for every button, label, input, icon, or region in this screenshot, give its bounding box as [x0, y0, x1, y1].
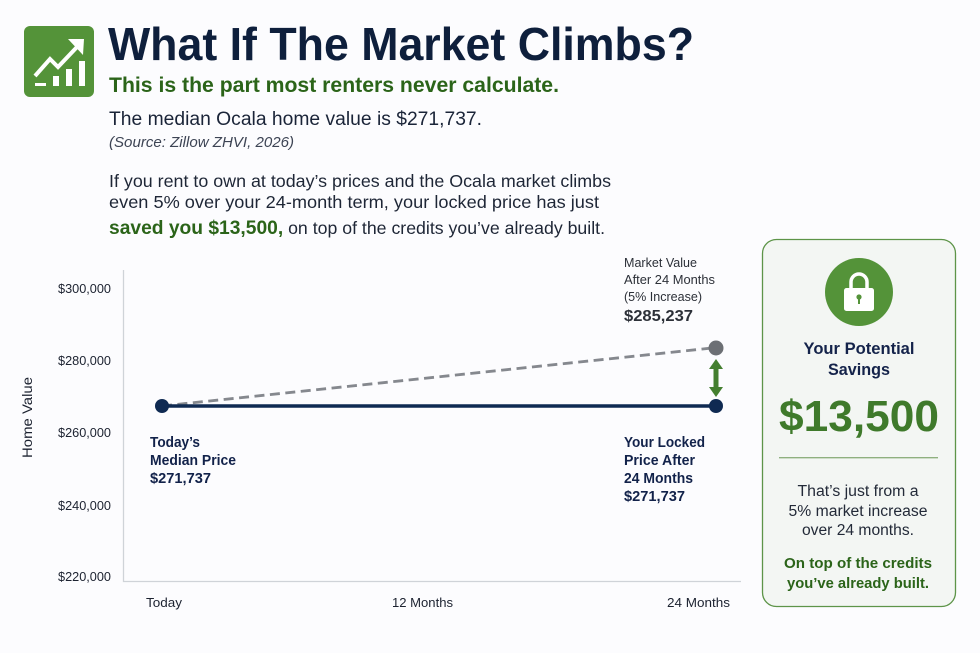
explanatory paragraph: saved you $13,500, on top of the credits you’ve already built. [109, 218, 605, 239]
savings explanation [788, 483, 928, 539]
explanatory paragraph: If you rent to own at today’s prices and the Ocala market climbs [109, 171, 611, 191]
chart axes [124, 270, 741, 582]
label: locked price after 24 months: Your Locked [624, 435, 705, 451]
credits note: On top of the credits [784, 556, 932, 572]
title: What If The Market Climbs? [108, 18, 694, 70]
credits note: you’ve already built. [787, 576, 929, 592]
line chart [19, 255, 741, 610]
label: market value after 24 months: $285,237 [624, 308, 693, 325]
source note: (Source: Zillow ZHVI, 2026) [109, 134, 294, 151]
y axis labels: $280,000 [58, 354, 111, 368]
label: locked price after 24 months: $271,737 [624, 489, 685, 505]
market value marker [708, 340, 724, 356]
x axis labels [146, 595, 731, 610]
icon: padlock [825, 258, 893, 326]
label: today's median price: Median Price [150, 453, 236, 469]
credits note [784, 556, 932, 592]
label: market value after 24 months [624, 255, 715, 325]
savings explanation: 5% market increase [788, 503, 928, 520]
savings heading: Savings [828, 361, 890, 379]
x axis labels: 12 Months [392, 595, 454, 610]
today marker [155, 399, 169, 413]
y axis labels: $260,000 [58, 426, 111, 440]
icon: rising market chart [24, 26, 94, 97]
label: locked price after 24 months: Price After [624, 453, 695, 469]
savings heading [804, 340, 914, 379]
x axis labels: Today [146, 595, 183, 610]
label: today's median price [150, 435, 236, 487]
y axis labels: $300,000 [58, 282, 111, 296]
label: locked price after 24 months: 24 Months [624, 471, 693, 487]
label: market value after 24 months: (5% Increase) [624, 289, 702, 304]
x axis labels: 24 Months [667, 595, 731, 610]
y axis labels: $220,000 [58, 570, 111, 584]
explanatory paragraph: even 5% over your 24-month term, your locked price has just [109, 192, 599, 212]
difference arrow [709, 359, 723, 397]
locked price line [162, 404, 716, 408]
panel: potential savings [762, 240, 956, 606]
savings explanation: over 24 months. [802, 522, 914, 539]
median value statement: The median Ocala home value is $271,737. [109, 109, 482, 130]
savings heading: Your Potential [804, 340, 914, 358]
label: today's median price: Today’s [150, 435, 200, 451]
savings explanation: That’s just from a [798, 483, 919, 500]
savings amount: $13,500 [779, 392, 939, 441]
label: today's median price: $271,737 [150, 471, 211, 487]
label: locked price after 24 months [624, 435, 705, 505]
y axis labels: $240,000 [58, 499, 111, 513]
explanatory paragraph [109, 171, 611, 239]
locked price marker [709, 399, 723, 413]
divider [779, 457, 938, 459]
label: market value after 24 months: Market Value [624, 255, 697, 270]
y axis labels [58, 282, 111, 584]
y axis title: Home Value [19, 377, 35, 458]
subtitle: This is the part most renters never calculate. [109, 74, 559, 97]
label: market value after 24 months: After 24 Months [624, 272, 715, 287]
market value dashed line [162, 348, 712, 406]
